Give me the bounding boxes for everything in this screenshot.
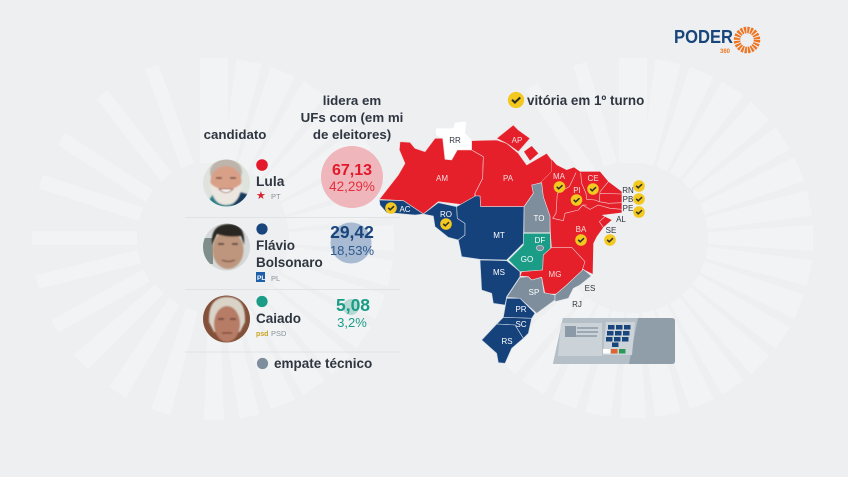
row: Caiado: PSD <box>271 329 287 338</box>
map labels: CE <box>587 174 599 183</box>
state: RR <box>436 122 472 160</box>
state: Marajó <box>524 146 538 161</box>
value: Caiado 5,08: 3,2% <box>337 315 367 330</box>
map labels: PI <box>573 186 581 195</box>
row: Caiado: Caiado <box>256 311 301 326</box>
map labels: RR <box>449 136 461 145</box>
map labels: GO <box>521 255 533 264</box>
state: MT <box>457 196 524 260</box>
map labels: AL <box>616 215 626 224</box>
state: DF <box>536 245 544 251</box>
row: Flávio Bolsonaro <box>203 223 323 283</box>
map labels: RJ <box>572 300 582 309</box>
map labels: PR <box>515 305 527 314</box>
map labels: ES <box>585 284 595 293</box>
icon: PT star: ★ <box>256 190 266 202</box>
state: AP <box>497 125 530 152</box>
party dot: Lula <box>256 159 268 171</box>
map labels: SE <box>606 226 616 235</box>
row: Caiado <box>203 295 301 343</box>
map labels: RN <box>622 186 634 195</box>
logo: Poder360: PODER <box>674 26 733 47</box>
party dot: Flávio <box>256 223 268 235</box>
state: RO <box>423 203 465 240</box>
value: Flávio 29,42: 29,42 <box>330 222 374 242</box>
icon: voting machine <box>553 318 675 364</box>
value: Caiado 5,08 <box>336 295 370 330</box>
state: GO <box>508 233 551 272</box>
value: Caiado 5,08: 5,08 <box>336 295 370 315</box>
map labels: SP <box>529 288 539 297</box>
state: ES / RJ <box>555 269 591 302</box>
map of Brazil <box>379 122 622 363</box>
state: TO <box>524 183 550 233</box>
photo: Caiado <box>203 295 250 343</box>
map labels: MG <box>549 270 561 279</box>
state: PR <box>503 298 535 318</box>
column heading: lidera em UFs <box>301 93 403 142</box>
map labels: MA <box>553 172 566 181</box>
state: SP <box>507 277 555 313</box>
photo: Flávio <box>203 223 250 271</box>
state: PA <box>472 140 552 207</box>
icon: PSD: psd <box>256 331 268 338</box>
party dot: Caiado <box>256 296 268 307</box>
map labels: AM <box>436 174 448 183</box>
value: Lula 67,13 <box>321 146 383 208</box>
value: Lula 67,13: 67,13 <box>332 162 372 179</box>
map labels: PE <box>623 204 633 213</box>
row: Flávio Bolsonaro: Flávio <box>256 238 295 253</box>
map labels: RO <box>440 210 452 219</box>
state: AC <box>379 200 423 215</box>
map labels: RS <box>501 337 513 346</box>
row: Lula: PT <box>271 192 281 201</box>
map labels: TO <box>534 214 544 223</box>
map labels: PA <box>503 174 514 183</box>
state: SC <box>497 317 532 338</box>
column heading: lidera em UFs: lidera em <box>323 93 381 108</box>
map labels: MT <box>493 231 505 240</box>
map labels: AP <box>512 136 522 145</box>
value: Lula 67,13: 42,29% <box>329 179 375 194</box>
legend: empate técnico: empate técnico <box>274 356 372 371</box>
map labels: PB <box>623 195 633 204</box>
row: Lula <box>203 159 285 207</box>
first-round win check marks <box>385 180 645 246</box>
row: Flávio Bolsonaro: PL <box>271 274 280 283</box>
map labels: BA <box>576 225 587 234</box>
value: Flávio 29,42: 18,53% <box>330 243 374 258</box>
map labels: AC <box>399 205 411 214</box>
states: Northeast <box>540 159 622 274</box>
legend: vitória em 1º turno: vitória em 1º turno <box>527 93 644 108</box>
column heading: lidera em UFs: de eleitores) <box>313 127 391 142</box>
map labels: SC <box>515 320 527 329</box>
state: MG <box>520 247 585 294</box>
state: MS <box>480 260 520 305</box>
logo: Poder360 <box>674 26 757 55</box>
photo: Lula <box>203 159 250 207</box>
state: RS <box>482 324 523 363</box>
row: Lula: Lula <box>256 174 285 189</box>
row: Flávio Bolsonaro: Bolsonaro <box>256 255 323 270</box>
state: AM <box>379 138 483 214</box>
map labels <box>399 136 634 346</box>
value: Flávio 29,42 <box>330 222 374 264</box>
logo: Poder360: 360 <box>720 49 731 55</box>
icon: PL: PL <box>257 275 265 282</box>
map labels: MS <box>493 268 505 277</box>
column heading: candidato: candidato <box>204 127 266 142</box>
map labels: DF <box>535 236 545 245</box>
column heading: lidera em UFs: UFs com (em mi <box>301 110 403 125</box>
